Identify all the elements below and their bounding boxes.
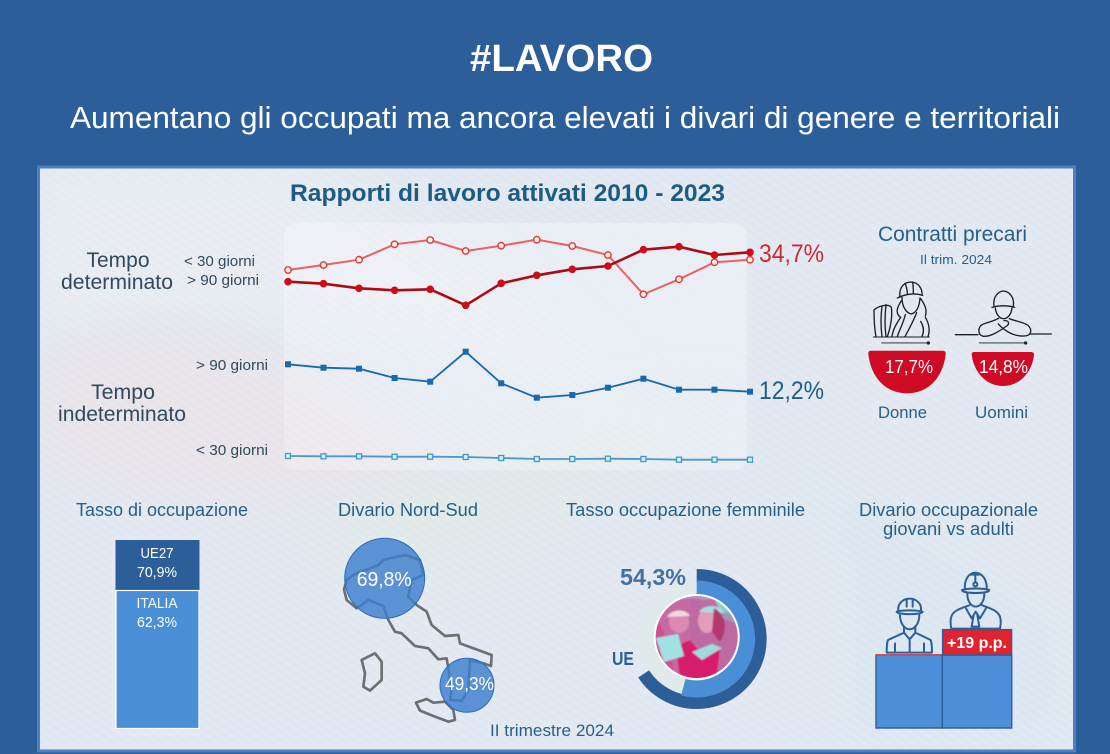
heading: Divario Nord-Sud xyxy=(338,500,478,520)
block: adult xyxy=(942,655,1012,728)
label: tempo determinato xyxy=(61,249,173,294)
footnote: II trimestre 2024 xyxy=(490,721,614,740)
series labels: < 30 giorni xyxy=(196,442,268,459)
bar: UE27: UE27 xyxy=(140,545,174,562)
series: determinato over 90 days xyxy=(284,243,754,309)
value: 12,2%: 12,2% xyxy=(759,377,824,405)
value: 14,8%: 14,8% xyxy=(979,357,1028,377)
label: tempo indeterminato: Tempo xyxy=(91,381,155,404)
series: indeterminato over 90 days xyxy=(285,349,753,401)
photo: workers xyxy=(654,594,740,680)
semicircle: uomini xyxy=(972,352,1034,386)
label: tempo indeterminato: indeterminato xyxy=(58,403,186,426)
panel: divario nord-sud xyxy=(338,500,494,722)
map: Italy xyxy=(344,555,492,722)
value: 17,7%: 17,7% xyxy=(885,357,933,377)
series labels: > 90 giorni xyxy=(187,272,259,289)
icon: woman worker xyxy=(873,282,929,344)
line chart xyxy=(284,236,754,462)
label: tempo determinato: determinato xyxy=(61,271,173,294)
photo ring xyxy=(655,595,739,679)
heading: giovani vs adulti xyxy=(883,519,1014,539)
heading: Tasso occupazione femminile xyxy=(566,500,805,520)
series: indeterminato under 30 days xyxy=(286,454,752,462)
panel: main xyxy=(38,167,1074,751)
label: tempo determinato: Tempo xyxy=(86,249,150,272)
panel: contratti precari xyxy=(868,223,1051,422)
series labels: < 30 giorni xyxy=(184,253,255,270)
label: uomini: Uomini xyxy=(975,403,1028,422)
label: donne: Donne xyxy=(878,403,927,422)
bubble: south: 49,3% xyxy=(445,674,494,694)
bubble: north xyxy=(345,538,425,618)
bar: UE27: 70,9% xyxy=(137,564,177,581)
bar: UE27 xyxy=(116,540,200,590)
title: #LAVORO xyxy=(470,38,653,80)
block: gap: +19 p.p. xyxy=(947,635,1007,652)
icon: young worker xyxy=(887,599,932,653)
heading: Divario occupazionale xyxy=(859,500,1038,520)
heading: chart: Rapporti di lavoro attivati 2010 - 2023 xyxy=(290,180,725,207)
icon: adult worker xyxy=(951,573,1001,629)
bar: Italia: ITALIA xyxy=(136,595,178,612)
panel: tasso occupazione femminile xyxy=(566,500,805,702)
bubble: north: 69,8% xyxy=(357,569,412,591)
panel: chart backdrop xyxy=(284,223,747,470)
subheading: trimester: Il trim. 2024 xyxy=(920,252,992,267)
series: determinato under 30 days xyxy=(285,236,753,297)
panel: tasso di occupazione xyxy=(76,500,248,728)
heading: contratti precari: Contratti precari xyxy=(878,223,1027,246)
panel: divario giovani adulti xyxy=(859,500,1038,728)
bar: Italia xyxy=(116,590,199,728)
series labels: > 90 giorni xyxy=(196,357,268,374)
bar: Italia: 62,3% xyxy=(137,614,177,631)
series labels xyxy=(184,253,268,459)
heading: Tasso di occupazione xyxy=(76,500,248,520)
donut chart xyxy=(644,576,760,702)
value: 54,3%: 54,3% xyxy=(620,564,686,590)
subtitle: Aumentano gli occupati ma ancora elevati i divari di genere e territoriali xyxy=(70,100,1060,135)
label: UE: UE xyxy=(612,649,634,669)
semicircle: donne xyxy=(868,351,946,393)
block: young xyxy=(876,655,942,728)
value: 34,7%: 34,7% xyxy=(759,240,824,268)
block: red top line xyxy=(876,654,942,656)
bubble: south xyxy=(440,658,494,712)
icon: male worker xyxy=(955,291,1051,344)
label: tempo indeterminato xyxy=(58,381,186,426)
block: gap xyxy=(943,630,1012,655)
heading xyxy=(859,500,1038,539)
